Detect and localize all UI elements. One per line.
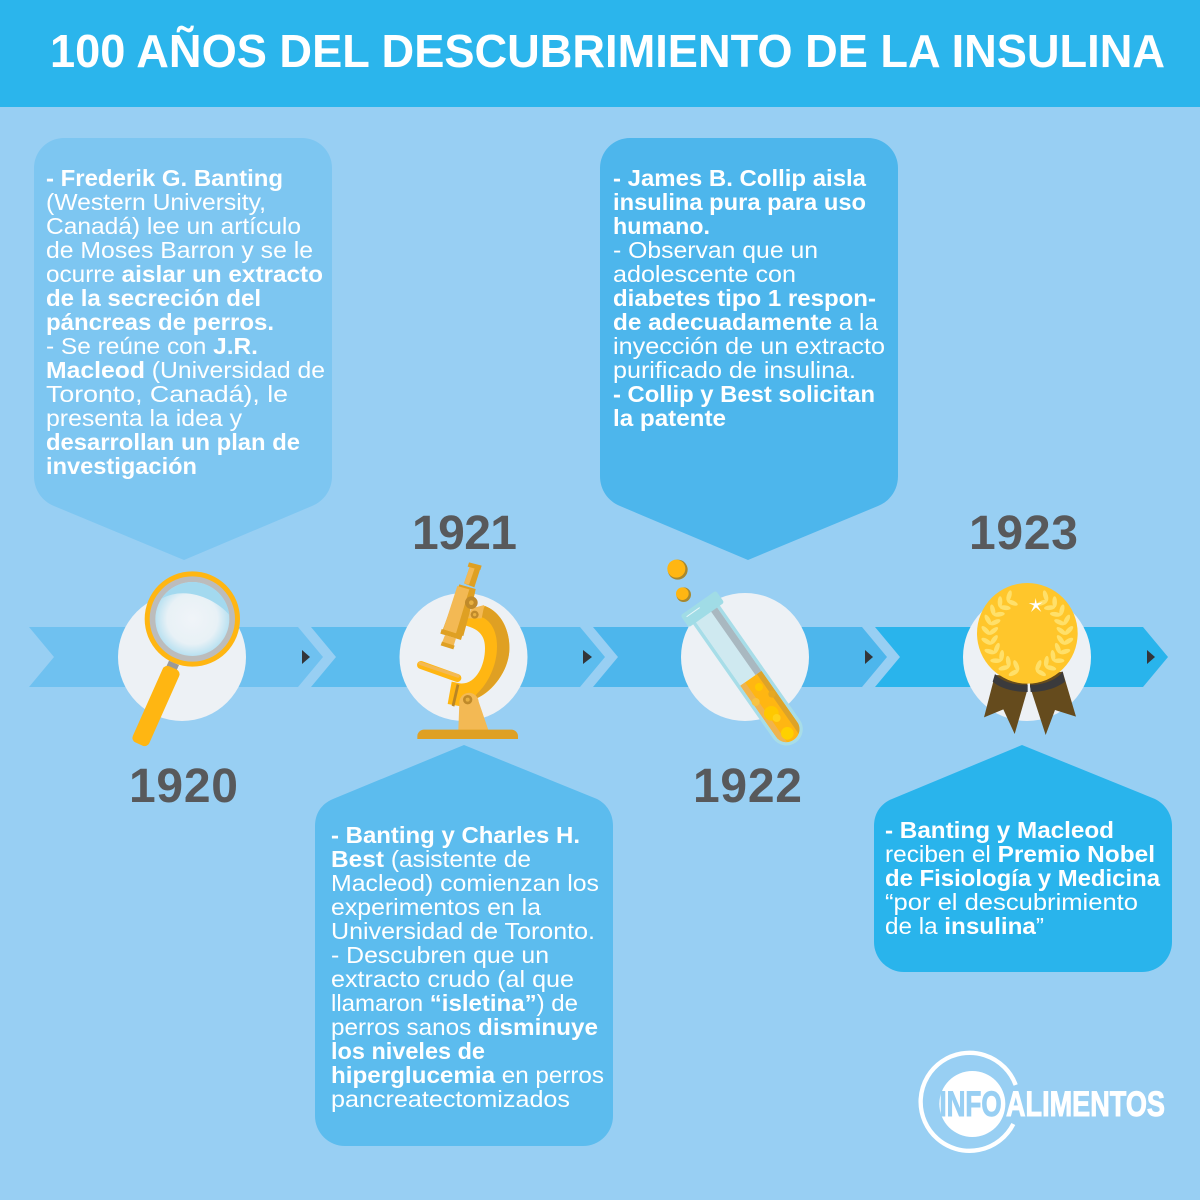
timeline arrow 1923 xyxy=(875,627,1168,687)
panel text 1921: Universidad de Toronto. xyxy=(331,918,595,944)
panel text 1920: - Se reúne con J.R. xyxy=(46,333,258,359)
header band xyxy=(0,0,1200,107)
panel text 1922: humano. xyxy=(613,213,710,239)
panel text 1923: - Banting y Macleod xyxy=(885,817,1114,843)
panel text 1920 xyxy=(46,165,325,479)
year 1922: 1922 xyxy=(693,760,802,813)
panel text 1920: (Western University, xyxy=(46,189,266,215)
panel text 1923: de Fisiología y Medicina xyxy=(885,865,1161,891)
panel text 1922: adolescente con xyxy=(613,261,796,287)
panel text 1920: desarrollan un plan de xyxy=(46,429,300,455)
timeline arrow 1921 xyxy=(311,627,605,687)
panel text 1922: - Collip y Best solicitan xyxy=(613,381,875,407)
icon: medal xyxy=(963,583,1091,735)
panel text 1923: de la insulina” xyxy=(885,913,1044,939)
panel: 1922 xyxy=(600,138,898,560)
panel text 1922: inyección de un extracto xyxy=(613,333,885,359)
panel text 1922: de adecuadamente a la xyxy=(613,309,879,335)
panel text 1920: de la secreción del xyxy=(46,285,261,311)
icon: microscope xyxy=(400,562,528,739)
panel text 1922: - Observan que un xyxy=(613,237,818,263)
panel: 1921 xyxy=(315,745,613,1146)
timeline arrow 1922 xyxy=(593,627,887,687)
panel text 1921: pancreatectomizados xyxy=(331,1086,570,1112)
logo: Infoalimentos: INFO xyxy=(939,1085,1002,1124)
panel text 1920: presenta la idea y xyxy=(46,405,242,431)
icon: magnifying glass xyxy=(118,571,246,748)
panel text 1922: purificado de insulina. xyxy=(613,357,856,383)
timeline arrow 1920 xyxy=(29,627,323,687)
title: 100 AÑOS DEL DESCUBRIMIENTO DE LA INSULINA xyxy=(50,25,1165,77)
panel text 1921: Best (asistente de xyxy=(331,846,531,872)
panel text 1920: de Moses Barron y se le xyxy=(46,237,313,263)
panel text 1921: Macleod) comienzan los xyxy=(331,870,599,896)
year 1921: 1921 xyxy=(412,507,517,560)
panel text 1921: hiperglucemia en perros xyxy=(331,1062,604,1088)
panel text 1921: experimentos en la xyxy=(331,894,542,920)
logo: Infoalimentos xyxy=(921,1053,1165,1151)
panel text 1923: “por el descubrimiento xyxy=(885,889,1138,915)
panel text 1922: diabetes tipo 1 respon- xyxy=(613,285,876,311)
panel text 1920: Toronto, Canadá), le xyxy=(46,381,288,407)
panel text 1921: los niveles de xyxy=(331,1038,485,1064)
panel text 1920: - Frederik G. Banting xyxy=(46,165,283,191)
panel text 1922: insulina pura para uso xyxy=(613,189,866,215)
panel text 1920: investigación xyxy=(46,453,197,479)
panel: 1920 xyxy=(34,138,332,560)
panel text 1921: - Descubren que un xyxy=(331,942,549,968)
panel text 1920: páncreas de perros. xyxy=(46,309,274,335)
panel text 1921: extracto crudo (al que xyxy=(331,966,574,992)
icon: test tube xyxy=(667,560,814,755)
panel text 1922: la patente xyxy=(613,405,726,431)
panel text 1923: reciben el Premio Nobel xyxy=(885,841,1155,867)
year 1923: 1923 xyxy=(969,507,1078,560)
panel text 1921 xyxy=(331,822,604,1112)
panel text 1920: Canadá) lee un artículo xyxy=(46,213,301,239)
panel text 1922: - James B. Collip aisla xyxy=(613,165,867,191)
panel text 1923 xyxy=(885,817,1161,939)
panel: 1923 xyxy=(874,745,1172,972)
panel text 1921: - Banting y Charles H. xyxy=(331,822,580,848)
panel text 1921: perros sanos disminuye xyxy=(331,1014,598,1040)
panel text 1920: Macleod (Universidad de xyxy=(46,357,325,383)
year 1920: 1920 xyxy=(129,760,238,813)
panel text 1921: llamaron “isletina”) de xyxy=(331,990,578,1016)
panel text 1920: ocurre aislar un extracto xyxy=(46,261,323,287)
panel text 1922 xyxy=(613,165,885,431)
